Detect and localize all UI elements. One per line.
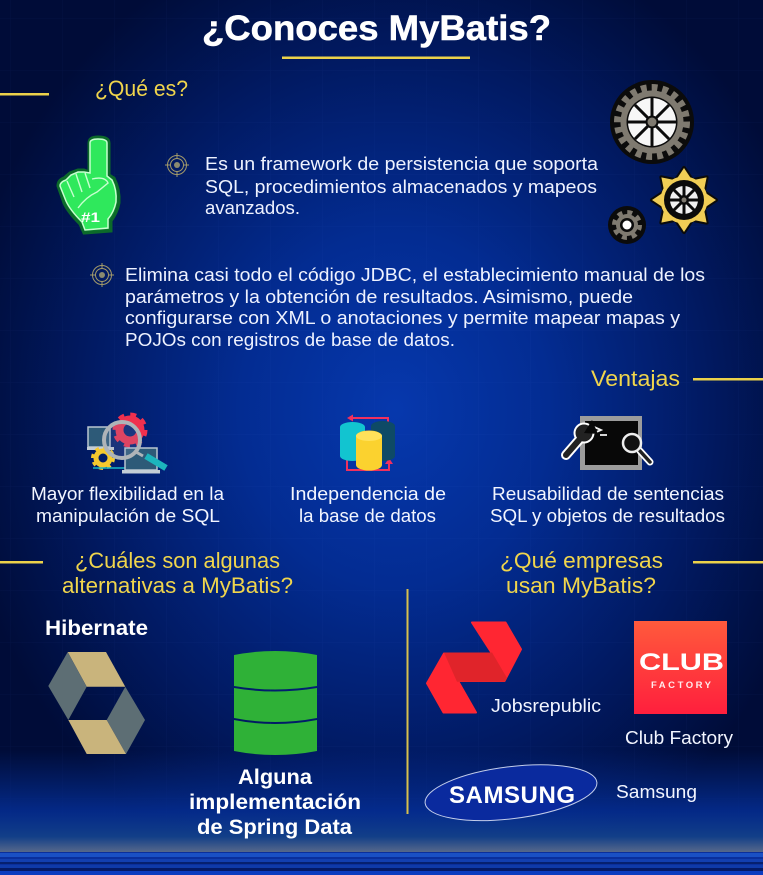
text block: description <box>125 265 705 350</box>
icon: foam finger <box>58 137 119 233</box>
panel: qué es <box>0 76 716 350</box>
label <box>31 484 225 526</box>
logo: club factory: CLUB <box>639 649 724 676</box>
label: jobsrepublic: Jobsrepublic <box>491 696 601 716</box>
divider <box>406 589 408 814</box>
heading accent line <box>0 561 43 564</box>
heading: alternativas: ¿Cuáles son algunas <box>75 548 280 573</box>
label: spring data: Alguna <box>238 766 312 789</box>
logo: samsung: SAMSUNG <box>449 782 575 809</box>
label: Independencia de <box>290 484 446 504</box>
text block: description: Elimina casi todo el código JDBC, el establecimiento manual de los <box>125 265 705 285</box>
heading: qué es: ¿Qué es? <box>95 76 188 101</box>
panel: ventajas <box>31 366 763 526</box>
text block: definition: SQL, procedimientos almacenados y mapeos <box>205 177 597 197</box>
label: club factory: Club Factory <box>625 728 733 748</box>
label: spring data: implementación <box>189 791 361 814</box>
label <box>290 484 446 526</box>
heading: alternativas <box>62 548 293 598</box>
icon: gears <box>608 80 716 244</box>
label <box>490 484 725 526</box>
heading accent line <box>693 378 763 380</box>
label: Reusabilidad de sentencias <box>492 484 724 504</box>
heading: empresas: usan MyBatis? <box>506 573 656 598</box>
text block: description: POJOs con registros de base de datos. <box>125 330 455 350</box>
label: spring data <box>189 766 361 839</box>
large gear <box>610 80 694 164</box>
heading: empresas: ¿Qué empresas <box>500 548 663 573</box>
heading accent line <box>0 93 49 96</box>
icon: target bullet 1 <box>165 153 189 177</box>
label: samsung: Samsung <box>616 782 697 802</box>
icon: target bullet 2 <box>90 263 114 287</box>
logo: samsung <box>422 756 600 829</box>
label: spring data: de Spring Data <box>197 816 352 839</box>
logo: jobsrepublic <box>427 622 521 712</box>
heading: ventajas: Ventajas <box>591 366 680 391</box>
logo: club factory: FACTORY <box>651 680 712 691</box>
label: hibernate: Hibernate <box>45 617 148 640</box>
text block: description: parámetros y la obtención de resultados. Asimismo, puede <box>125 287 633 307</box>
panel: empresas <box>422 548 763 829</box>
heading accent line <box>693 561 763 564</box>
icon: green database <box>234 651 317 755</box>
panel: alternativas <box>0 548 361 839</box>
logo: hibernate <box>48 652 145 754</box>
heading: empresas <box>500 548 663 598</box>
text block: description: configurarse con XML o anotaciones y permite mapear mapas y <box>125 308 680 328</box>
icon: foam finger: #1 <box>81 209 100 225</box>
small gear <box>608 206 646 244</box>
label: manipulación de SQL <box>36 506 220 526</box>
icon: database cylinders <box>340 414 395 470</box>
logo: club factory <box>634 621 727 714</box>
icon: terminal, wrench and magnifier <box>566 416 650 470</box>
medium gear <box>652 168 716 232</box>
text block: definition <box>205 154 599 218</box>
label: la base de datos <box>299 506 436 526</box>
title: ¿Conoces MyBatis? <box>202 9 551 48</box>
label: SQL y objetos de resultados <box>490 506 725 526</box>
icon: laptops, gears and magnifier <box>87 414 166 474</box>
title underline <box>282 56 470 59</box>
label: Mayor flexibilidad en la <box>31 484 225 504</box>
text block: definition: Es un framework de persistencia que soporta <box>205 154 599 174</box>
heading: alternativas: alternativas a MyBatis? <box>62 573 293 598</box>
text block: definition: avanzados. <box>205 198 300 218</box>
